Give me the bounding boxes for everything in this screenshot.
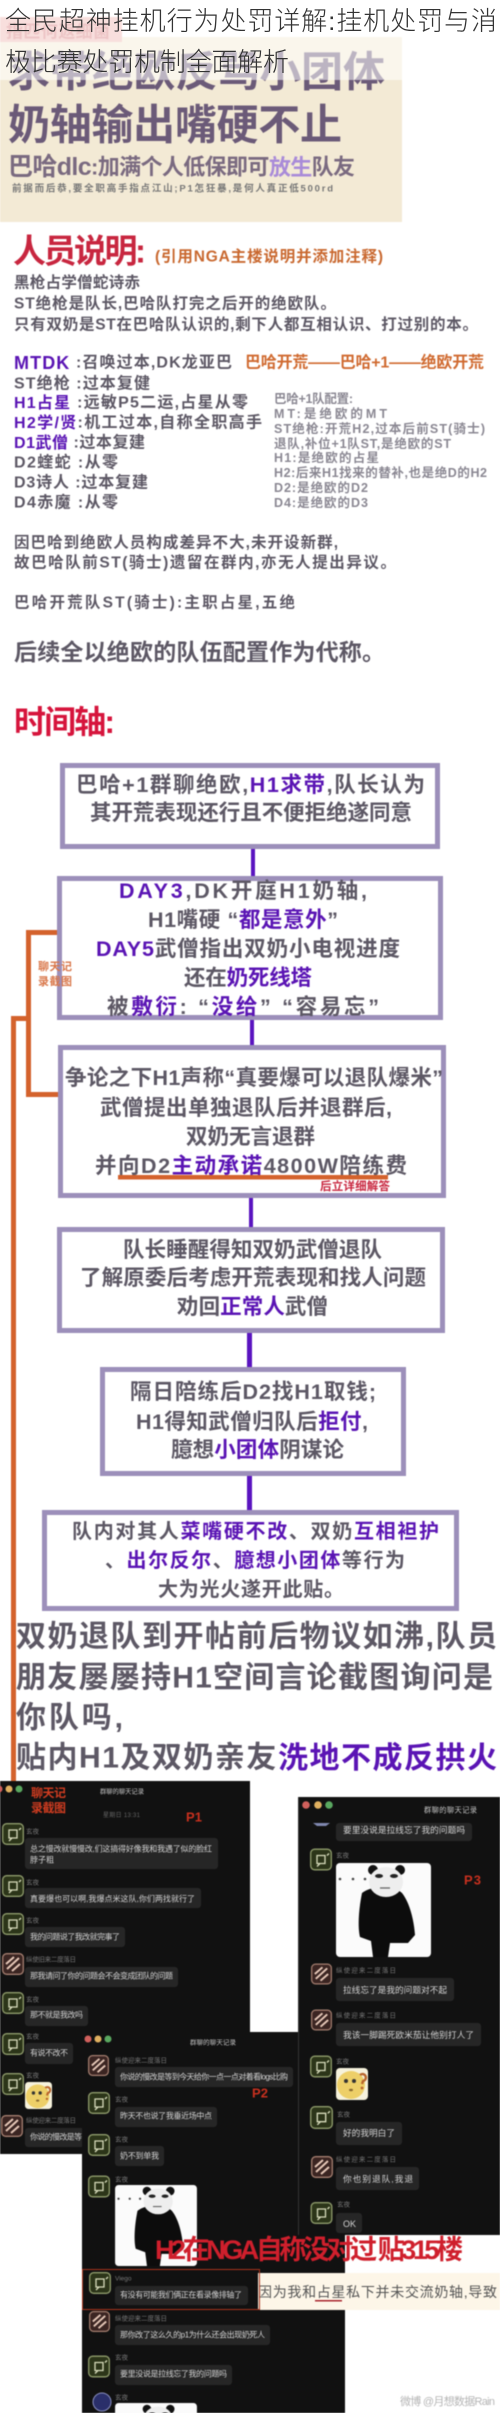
- roster list: D2蝰蛇 :从零: [14, 452, 118, 472]
- red highlight frame: [82, 2270, 260, 2310]
- page label P1: P1: [186, 1810, 202, 1824]
- messages: 玄夜: [26, 1916, 40, 1924]
- box 1: [62, 766, 438, 846]
- box 2: [60, 878, 440, 1019]
- messages: 有没有可能我们俩正在看录像排轴了: [120, 2290, 242, 2300]
- banner footnote: 前据而后恭,要全职高手指点江山;P1怎狂暴,是何人真正低500rd: [12, 182, 333, 194]
- messages: 玄夜: [26, 1994, 40, 2004]
- chat screenshot P3: [298, 1797, 500, 2235]
- quote strip from NGA post: [82, 2270, 500, 2310]
- box 3: [60, 1048, 444, 1196]
- line: long orange connector: [11, 1016, 28, 1781]
- messages: 好的我明白了: [343, 2127, 395, 2138]
- panel: top banner: [0, 0, 500, 222]
- chat label: [31, 1786, 66, 1815]
- intro text: [14, 272, 478, 334]
- team configuration note: 退队,补位+1队ST,是绝欧的ST: [274, 436, 451, 451]
- explanation text: 巴哈开荒队ST(骑士):主职占星,五绝: [14, 592, 295, 612]
- messages: 纵使迎来二度落日: [26, 2116, 76, 2124]
- messages: 你说的慢改是等到今天给你一点一点对着看logs比购: [120, 2072, 288, 2082]
- box 2: 还在奶死线塔: [184, 966, 312, 990]
- explanation text: 因巴哈到绝欧人员构成差异不大,未开设新群,: [14, 532, 338, 552]
- messages: 纵使迎来二度落日: [115, 2314, 167, 2322]
- roster list: D1武僧 :过本复建: [14, 434, 145, 452]
- box 6: 大为光火遂开此贴。: [158, 1578, 344, 1601]
- messages: 纵使迎来二度落日: [336, 2154, 396, 2164]
- roster list: H1占星 :远敏P5二运,占星从零: [14, 394, 248, 412]
- messages: 玄夜: [115, 2352, 128, 2362]
- quote underline: [315, 2300, 342, 2302]
- summary paragraph: [16, 1620, 497, 1774]
- box 6: 队内对其人菜嘴硬不改、双奶互相袒护: [72, 1520, 439, 1543]
- box 3: 争论之下H1声称“真要爆可以退队爆米”: [65, 1065, 443, 1090]
- messages: 拉线忘了是我的问题对不起: [343, 1984, 447, 1995]
- messages: 纵使迎来二度落日: [336, 2010, 396, 2020]
- box 2: DAY5武僧指出双奶小电视进度: [96, 937, 400, 961]
- roster list: [14, 353, 262, 512]
- naming note: 后续全以绝欧的队伍配置作为代称。: [14, 639, 385, 665]
- summary paragraph: 贴内H1及双奶亲友洗地不成反拱火: [16, 1742, 497, 1774]
- messages: 玄夜: [337, 2110, 350, 2118]
- team configuration note: 巴哈+1队配置:: [274, 391, 353, 406]
- team configuration note: H2:后来H1找来的替补,也是绝D的H2: [274, 465, 487, 480]
- messages: 那你改了这么久的p1为什么还会出现奶死人: [120, 2330, 265, 2340]
- bracket: chat record link: [26, 930, 59, 1097]
- messages: 要里没说是拉线忘了我的问题吗: [120, 2368, 227, 2378]
- box 1: 巴哈+1群聊绝欧,H1求带,队长认为: [76, 772, 425, 797]
- messages: 玄夜: [336, 2056, 350, 2066]
- intro text: 只有双奶是ST在巴哈队认识的,剩下人都互相认识、打过别的本。: [14, 314, 478, 334]
- team configuration note: ST绝枪:开荒H2,过本后前ST(骑士): [274, 421, 485, 436]
- team configuration note: D2:是绝欧的D2: [274, 480, 368, 495]
- messages: 玄夜: [115, 2392, 128, 2402]
- summary paragraph: 双奶退队到开帖前后物议如沸,队员: [16, 1620, 497, 1654]
- explanation text: 故巴哈队前ST(骑士)遗留在群内,亦无人提出异议。: [14, 552, 396, 572]
- quote strip from NGA post: 因为我和占星私下并未交流奶轴,导致: [258, 2284, 497, 2300]
- title: 极比赛处罚机制全面解析: [5, 47, 289, 77]
- messages: 玄夜: [115, 2094, 128, 2104]
- summary paragraph: 你队吗,: [16, 1702, 123, 1734]
- summary paragraph: 朋友屡屡持H1空间言论截图询问是: [16, 1662, 493, 1694]
- messages: 那不就是我改吗: [30, 2010, 83, 2020]
- window title: 群聊的聊天记录: [100, 1786, 144, 1796]
- box 4: 劝回正常人武僧: [177, 1295, 328, 1319]
- intro text: ST绝枪是队长,巴哈队打完之后开的绝欧队。: [14, 294, 336, 312]
- page label P3: P3: [464, 1872, 481, 1888]
- messages: 我该一脚踢死欧米茄让他别打人了: [343, 2029, 474, 2040]
- messages: 玄夜: [26, 2032, 40, 2040]
- banner headline: [8, 48, 385, 148]
- messages: 真要爆也可以啊,我爆点米这队,你们两找就行了: [30, 1894, 195, 1904]
- window title: 星期日 13:31: [103, 1811, 141, 1819]
- box 5: 臆想小团体阴谋论: [171, 1438, 344, 1462]
- box 6: 、出尔反尔、臆想小团体等行为: [105, 1549, 405, 1572]
- chat label: 录截图: [31, 1800, 66, 1815]
- messages: 那我请问了你的问题会不会变成团队的问题: [30, 1970, 173, 1980]
- box 1: 其开荒表现还行且不便拒绝遂同意: [90, 800, 412, 825]
- messages: 玄夜: [26, 2070, 40, 2080]
- messages: [89, 2056, 293, 2413]
- team configuration note: [274, 391, 487, 510]
- messages: 脖子粗: [30, 1854, 54, 1864]
- label: chat screenshots: 录截图: [38, 974, 72, 988]
- box 5: [102, 1370, 404, 1474]
- window title: 群聊的聊天记录: [424, 1806, 477, 1814]
- section: staff description: [13, 232, 487, 665]
- messages: OK: [343, 2219, 356, 2229]
- messages: 玄夜: [26, 1826, 40, 1836]
- heading note: (引用NGA主楼说明并添加注释): [155, 246, 383, 266]
- messages: 总之慢改就慢慢改,们这搞得好像我和我遇了似的脸红: [30, 1844, 212, 1854]
- team configuration note: H1:是绝欧的占星: [274, 450, 379, 465]
- roster list: MTDK :召唤过本,DK龙亚巴: [14, 353, 232, 373]
- roster list: H2学/贤:机工过本,自称全职高手: [14, 412, 262, 432]
- title: 全民超神挂机行为处罚详解:挂机处罚与消: [5, 6, 497, 36]
- box 5: 隔日陪练后D2找H1取钱;: [130, 1379, 376, 1404]
- box 3: 武僧提出单独退队后并退群后,: [100, 1096, 392, 1120]
- messages: 玄夜: [336, 1850, 350, 1860]
- chat label: 聊天记: [31, 1786, 66, 1800]
- pink tag: [0, 17, 122, 42]
- messages: 奶不到单我: [120, 2150, 159, 2160]
- messages: 玄夜: [115, 2134, 128, 2144]
- messages: Viego: [115, 2276, 132, 2282]
- box 4: [60, 1230, 442, 1330]
- underline: [118, 1175, 388, 1180]
- window buttons: [302, 1801, 333, 1809]
- team configuration note: MT:是绝欧的MT: [274, 406, 387, 421]
- roster list: D3诗人 :过本复建: [14, 474, 148, 492]
- box 4: 队长睡醒得知双奶武僧退队: [123, 1238, 382, 1262]
- box 2: DAY3,DK开庭H1奶轴,: [119, 878, 367, 903]
- banner subheading: 巴哈dlc:加满个人低保即可放生队友: [8, 153, 355, 181]
- box 3: 双奶无言退群: [186, 1125, 315, 1149]
- page label P2: P2: [252, 2086, 268, 2100]
- connector 1: [251, 846, 255, 878]
- connector 2: [250, 1018, 254, 1046]
- explanation text: [14, 532, 396, 612]
- box 3: 并向D2主动承诺4800W陪练费: [95, 1153, 407, 1178]
- label: chat screenshots: 聊天记: [38, 959, 72, 973]
- box 5: H1得知武僧归队后拒付,: [136, 1410, 368, 1434]
- box 4: 了解原委后考虑开荒表现和找人问题: [80, 1266, 426, 1290]
- messages: [311, 1823, 481, 2233]
- connector 4: [247, 1331, 252, 1368]
- callout: H2 claim: H2在NGA自称没对过 贴315楼: [155, 2235, 463, 2265]
- messages: 你也别退队,我退: [343, 2173, 413, 2184]
- messages: 我的问题说了我改就完事了: [30, 1932, 120, 1942]
- watermark: 微博 @月想数据Rain: [400, 2394, 495, 2408]
- roster list: D4赤魔 :从零: [14, 494, 118, 512]
- team configuration note: D4:是绝欧的D3: [274, 495, 368, 510]
- chat screenshot P1: [0, 1781, 250, 2154]
- heading: staff: 人员说明:: [13, 232, 146, 270]
- messages: 纵使迎来二度落日: [336, 1966, 396, 1974]
- pink tag: 指匹何返细菌: [6, 22, 110, 42]
- messages: 昨天不也说了我垂近场中点: [120, 2110, 212, 2120]
- messages: 玄夜: [115, 2174, 128, 2184]
- chat screenshot P2: [82, 2032, 345, 2413]
- intro text: 黑枪占学僧蛇诗赤: [14, 272, 140, 292]
- annotation: 后立详细解答: [320, 1179, 390, 1193]
- box 2: 被敷衍: “没给” “容易忘”: [107, 994, 379, 1019]
- label: chat screenshots: [38, 959, 72, 988]
- messages: 纵使旧来二度落日: [26, 1954, 76, 1964]
- messages: 纵使迎来二度落日: [115, 2056, 167, 2064]
- roster list: ST绝枪 :过本复健: [14, 374, 150, 392]
- box 2: H1嘴硬 “都是意外”: [148, 908, 338, 932]
- title: [5, 6, 497, 77]
- window title: [100, 1786, 144, 1819]
- window buttons: [0, 1786, 22, 1792]
- messages: 玄夜: [26, 1878, 40, 1886]
- heading: timeline: 时间轴:: [14, 704, 115, 740]
- messages: 要里没说是拉线忘了我的问题吗: [343, 1824, 465, 1835]
- top fade: [0, 0, 500, 80]
- box 6: [44, 1512, 456, 1608]
- progression note: 巴哈开荒——巴哈+1——绝欧开荒: [245, 352, 484, 372]
- banner headline: 奶轴输出嘴硬不止: [8, 102, 342, 148]
- messages: 你说的慢改是等: [30, 2132, 82, 2142]
- messages: 有说不改不: [30, 2048, 68, 2058]
- messages: 玄夜: [337, 2200, 350, 2208]
- window buttons: [84, 2036, 112, 2042]
- connector 3: [249, 1194, 253, 1229]
- banner headline: 求带绝欧反骂小团体: [8, 48, 385, 96]
- messages: [2, 1824, 218, 2147]
- window title: 群聊的聊天记录: [190, 2038, 236, 2046]
- connector 5: [247, 1474, 252, 1512]
